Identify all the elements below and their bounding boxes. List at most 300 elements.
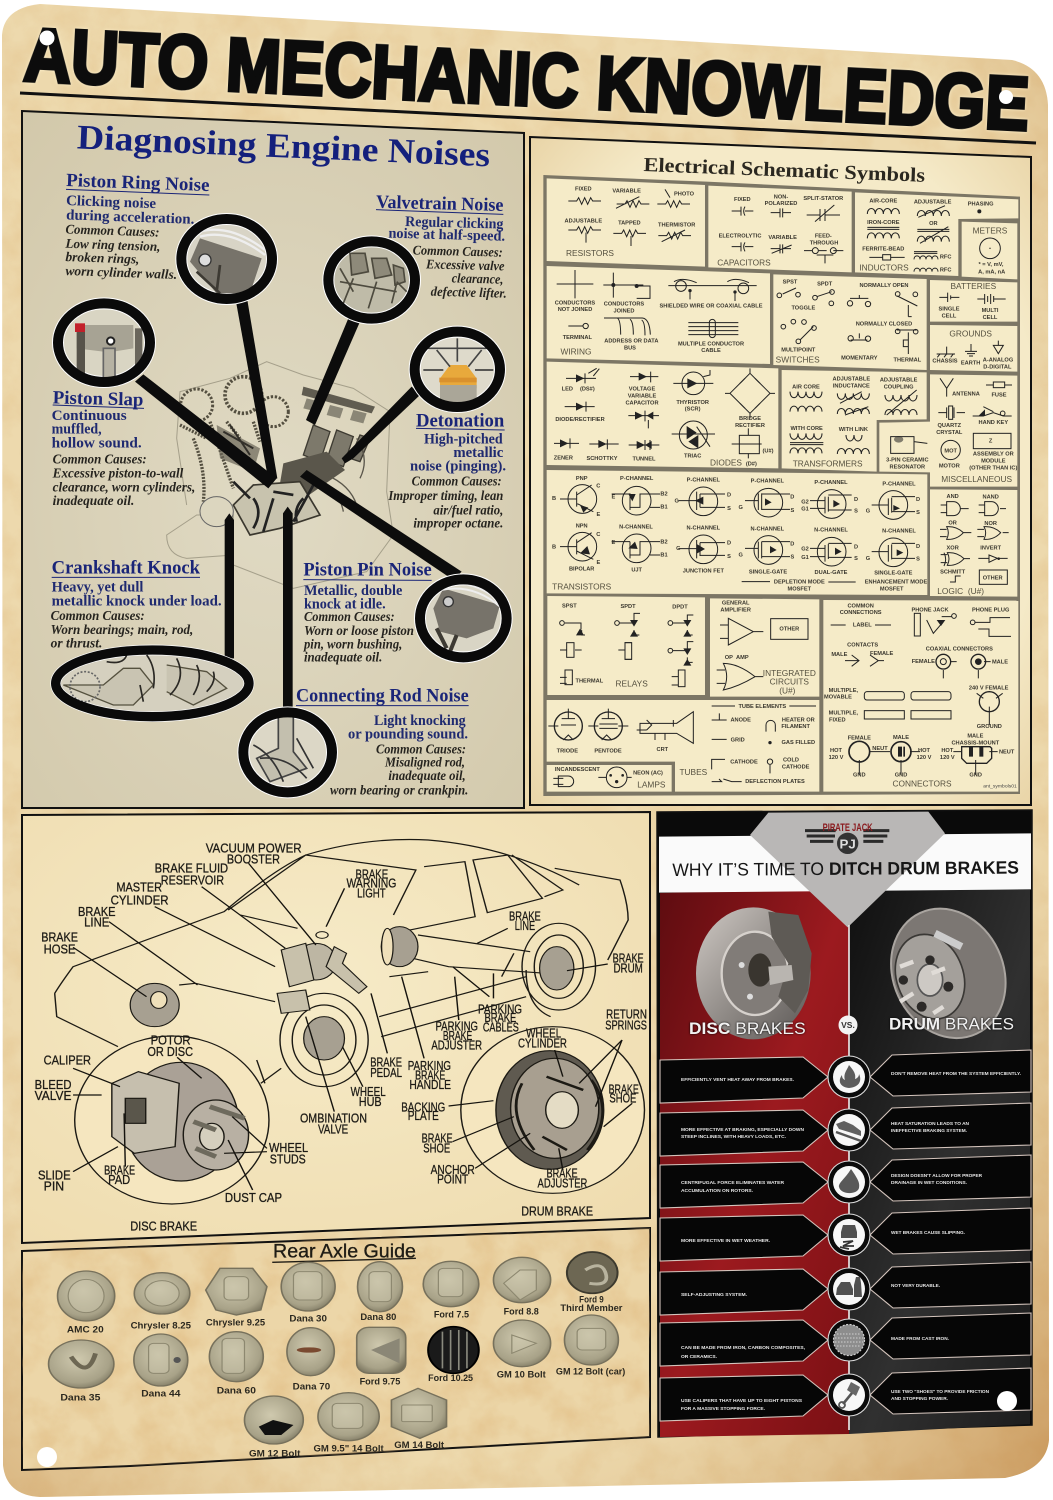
cell: miscellaneous: FUSE [991, 392, 1007, 398]
cell: miscellaneous: MISCELLANEOUS [941, 474, 1013, 484]
part labels: HANDLE [409, 1078, 451, 1093]
block: connecting rod noise: Connecting Rod Noise [296, 686, 469, 707]
title rule [20, 93, 1036, 143]
cell: lamps: INCANDESCENT [555, 767, 600, 773]
drum drawbacks text: DESIGN DOESN'T ALLOW FOR PROPER [891, 1173, 982, 1179]
cell: integrated circuits: OTHER [779, 627, 799, 633]
cell: capacitors: SPLIT-STATOR [803, 196, 843, 202]
cell: transistors: B2 [660, 539, 668, 545]
drum brake photo [870, 890, 1026, 1057]
cell: relays: THERMAL [576, 678, 604, 684]
cell: transistors: S [790, 555, 794, 561]
block: piston ring noise: Common Causes: [65, 221, 160, 240]
cell: batteries: CELL [983, 315, 998, 321]
cell: transistors: E [596, 560, 600, 566]
cell: logic: INVERT [980, 545, 1002, 551]
cell: connectors: COAXIAL CONNECTORS [926, 646, 993, 652]
cell: capacitors: CAPACITORS [717, 257, 771, 267]
part labels: CYLINDER [111, 894, 169, 908]
block: connecting rod noise: Common Causes: [376, 741, 466, 756]
part labels: MASTER [116, 881, 162, 895]
disc advantages text: USE CALIPERS THAT HAVE UP TO EIGHT PISTONS [681, 1398, 803, 1404]
part labels: OMBINATION [300, 1112, 367, 1126]
cell: resistors: THERMISTOR [658, 223, 695, 229]
drum drawbacks text: WET BRAKES CAUSE SLIPPING. [891, 1230, 966, 1236]
cell: inductors: AIR-CORE [869, 199, 898, 205]
cell: miscellaneous: ANTENNA [952, 391, 980, 397]
icon: water drop [828, 1161, 870, 1203]
drum drawbacks text [891, 1071, 1022, 1402]
part labels: WHEEL [351, 1085, 386, 1100]
cell: tubes: CATHODE [782, 764, 810, 770]
part labels: PARKING [436, 1020, 478, 1034]
part labels: BRAKE [356, 868, 388, 882]
axle covers row 3 [244, 1388, 447, 1444]
cell: capacitors: FEED- [815, 233, 832, 239]
cell: tubes: HEATER OR [782, 717, 815, 723]
cell: transformers: TRANSFORMERS [793, 459, 863, 469]
cell: connectors: 120 V [917, 755, 932, 761]
block: connecting rod noise: worn bearing or crankpin. [330, 782, 468, 797]
heading underline [272, 1258, 416, 1262]
part labels: BRAKE [78, 905, 116, 920]
banner and logo [659, 812, 1031, 1057]
block: detonation [387, 411, 506, 531]
block: valvetrain noise [376, 192, 507, 301]
cell: transformers: ADJUSTABLE [880, 378, 918, 384]
part labels: BRAKE [422, 1132, 453, 1146]
cell: transistors: D [916, 544, 920, 550]
cell: connectors: GND [969, 773, 982, 779]
part labels: POTOR [151, 1034, 191, 1048]
part labels: SPRINGS [605, 1019, 647, 1033]
cell: resistors: TAPPED [618, 220, 641, 226]
cell: transistors: SINGLE-GATE [749, 570, 787, 576]
part labels: DUST CAP [225, 1191, 282, 1206]
cell: transistors: JUNCTION FET [683, 568, 724, 574]
cell: diodes [547, 362, 778, 468]
block: valvetrain noise: defective lifter. [431, 284, 507, 301]
block: detonation: metallic [453, 445, 504, 461]
cell: transistors: MOSFET [788, 587, 812, 593]
part labels: DISC BRAKE [130, 1220, 197, 1234]
part labels: WHEEL [269, 1141, 308, 1156]
axle labels: GM 10 Bolt [497, 1371, 546, 1380]
cell: connectors: NEUT [872, 746, 888, 752]
cell: miscellaneous: RESONATOR [890, 464, 925, 470]
part labels: BRAKE [484, 1011, 516, 1026]
cell: diodes: VOLTAGE [629, 386, 655, 392]
block: piston pin noise [303, 560, 432, 665]
cell: transistors: G2 [801, 500, 809, 506]
block: piston ring noise: worn cylinder walls. [65, 263, 177, 282]
block: detonation: Common Causes: [412, 474, 502, 489]
cell: diodes: TRIAC [684, 454, 701, 460]
cell: transistors: C [596, 483, 600, 489]
part labels: CYLINDER [518, 1037, 567, 1051]
cell: capacitors: NON- [774, 194, 788, 200]
cell: batteries: SINGLE [938, 307, 960, 313]
part labels: CALIPER [44, 1054, 91, 1068]
cell: logic: SCHMITT [940, 570, 966, 576]
block: detonation: noise (pinging). [410, 458, 506, 474]
cell: connectors: FIXED [829, 718, 846, 724]
cell: switches [773, 274, 927, 370]
cell: transistors: P-CHANNEL [882, 481, 916, 487]
block: connecting rod noise [296, 686, 469, 797]
cell: switches: SPDT [817, 281, 833, 287]
cell: tubes: DEFLECTION PLATES [745, 779, 805, 785]
part labels: SHOE [423, 1142, 450, 1156]
cell: diodes: (U#) [762, 448, 774, 454]
cell: tubes: CRT [657, 747, 669, 753]
part labels: ADJUSTER [431, 1039, 482, 1053]
cell: grounds: GROUNDS [949, 329, 992, 339]
cell: transistors: NPN [576, 524, 588, 530]
block: piston ring noise [64, 170, 210, 282]
leader lines [73, 863, 632, 1190]
cell: transistors: G [676, 546, 681, 552]
part labels: BOOSTER [227, 853, 280, 867]
part labels: PARKING [408, 1059, 451, 1074]
part labels: SLIDE [38, 1169, 71, 1183]
block: piston slap: muffled, [52, 421, 102, 437]
drum drawbacks text: DON'T REMOVE HEAT FROM THE SYSTEM EFFICIENTLY. [891, 1071, 1022, 1077]
cell: grounds: A-ANALOG [983, 358, 1014, 364]
axle labels: Ford 10.25 [428, 1374, 473, 1384]
vs badge: VS. [841, 1020, 855, 1030]
cell: connectors: 120 V [940, 755, 955, 761]
block: piston slap: Continuous [52, 408, 127, 424]
disc advantages text: MORE EFFECTIVE AT BRAKING, ESPECIALLY DOWN [681, 1127, 804, 1133]
cell: transistors: G [738, 505, 743, 511]
rear axle contents [49, 1239, 625, 1459]
part labels: OR DISC [147, 1045, 193, 1060]
engine sketch [167, 362, 393, 588]
cell: transistors: G [866, 509, 871, 515]
disc advantages text: OR CERAMICS. [681, 1354, 718, 1360]
cell: tubes: PENTODE [594, 749, 622, 755]
cell: diodes: ZENER [554, 455, 573, 461]
block: crankshaft knock: metallic knock under load. [52, 594, 222, 610]
block: piston pin noise: Common Causes: [304, 609, 395, 624]
cell: wiring [547, 266, 770, 364]
cell: integrated circuits: AMPLIFIER [720, 607, 751, 613]
part labels: BACKING [401, 1101, 445, 1115]
axle labels: Dana 70 [293, 1382, 331, 1392]
cell: wiring: TERMINAL [563, 335, 592, 341]
part labels: STUDS [270, 1153, 306, 1167]
cell: transformers: WITH CORE [790, 426, 823, 432]
cell: transistors: MOSFET [880, 587, 904, 593]
cell: transformers: ADJUSTABLE [833, 377, 870, 383]
block: piston ring noise: during acceleration. [66, 207, 195, 228]
cell: miscellaneous: QUARTZ [938, 423, 962, 429]
cell: transistors: G1 [801, 507, 809, 513]
axle labels: GM 12 Bolt (car) [556, 1367, 625, 1377]
heading: Diagnosing Engine Noises [76, 118, 491, 174]
part labels: LIGHT [357, 887, 386, 901]
panel mottling [22, 1228, 650, 1470]
disc advantages text: MORE EFFECTIVE IN WET WEATHER. [681, 1238, 771, 1244]
cell: inductors: INDUCTORS [859, 263, 909, 273]
cell: logic: NOR [984, 521, 997, 527]
heading: Electrical Schematic Symbols [643, 154, 926, 187]
axle labels: Ford 8.8 [504, 1307, 539, 1317]
cell: inductors [855, 192, 1018, 276]
cell: transformers: INDUCTANCE [833, 383, 870, 389]
cell: connectors: LABEL [853, 623, 872, 629]
block: crankshaft knock [51, 557, 222, 651]
cell: transistors: E [611, 495, 615, 501]
cell: transistors: S [916, 510, 920, 516]
disc advantages text: EFFICIENTLY VENT HEAT AWAY FROM BRAKES. [681, 1077, 795, 1083]
cell: transistors: S [727, 506, 731, 512]
drum brakes label: DRUM BRAKES [889, 1014, 1014, 1033]
cell: tubes: ANODE [730, 718, 751, 724]
cell: inductors: ADJUSTABLE [914, 199, 952, 205]
engine block [200, 387, 375, 535]
cell: transistors: D [727, 493, 731, 499]
cell: connectors: MALE [831, 652, 848, 658]
cell: diodes: (D#) [746, 461, 757, 467]
cell: switches: TOGGLE [791, 305, 815, 311]
part labels: VACUUM POWER [206, 842, 302, 856]
cell: integrated circuits: CIRCUITS [770, 676, 809, 686]
car outline [55, 839, 628, 1087]
cell: diodes: DIODES [710, 457, 742, 467]
cell: transistors: C [596, 532, 600, 538]
cell: logic [930, 489, 1017, 597]
block: crankshaft knock: Crankshaft Knock [52, 557, 201, 578]
axle covers row 1 [58, 1252, 618, 1321]
cell: transistors: B1 [660, 553, 668, 559]
panel: why it's time to ditch drum brakes [657, 810, 1032, 1437]
icon: mechanic and car [828, 1268, 870, 1310]
drum drawbacks text: USE TWO "SHOES" TO PROVIDE FRICTION [891, 1389, 989, 1395]
cell: connectors: CONNECTORS [892, 779, 952, 789]
cell: transistors: UJT [631, 567, 643, 573]
cell: logic: OTHER [983, 575, 1003, 581]
cell: grounds [930, 325, 1017, 372]
cell: logic: NAND [982, 495, 999, 501]
block: piston slap: inadequate oil. [53, 493, 134, 508]
cell: relays: DPDT [672, 604, 688, 610]
cell: transistors: D [790, 494, 794, 500]
axle labels: Chrysler 9.25 [206, 1318, 265, 1328]
cell: transistors: G [866, 556, 871, 562]
axle labels: Dana 60 [217, 1386, 256, 1396]
cell: transistors: N-CHANNEL [882, 529, 916, 535]
drum drawbacks text: INEFFECTIVE BRAKING SYSTEM. [891, 1128, 968, 1134]
axle labels: GM 9.5" 14 Bolt [313, 1445, 384, 1454]
cell: connectors: FEMALE [870, 651, 894, 657]
cell: transistors: D [854, 545, 858, 551]
part labels: BLEED [35, 1078, 72, 1093]
cell: diodes: SCHOTTKY [586, 456, 618, 462]
disc advantages text [681, 1077, 806, 1412]
cell: logic: OR [948, 520, 957, 526]
axle labels: GM 12 Bolt [249, 1450, 301, 1459]
cell: miscellaneous: CRYSTAL [936, 430, 963, 436]
lens: valvetrain noise [328, 241, 415, 319]
disc advantages text: STEEP INCLINES, WITH HEAVY LOADS, ETC. [681, 1134, 787, 1140]
cell: switches: MULTIPOINT [781, 348, 816, 354]
cell: wiring: CONDUCTORS [604, 302, 644, 308]
part labels: LINE [515, 919, 535, 934]
silver diamond [750, 812, 945, 927]
dark drum side background [849, 888, 1030, 1434]
cell: integrated circuits: (U#) [779, 685, 796, 695]
white banner [659, 833, 1031, 893]
block: piston slap: hollow sound. [52, 436, 142, 452]
cell: relays: RELAYS [616, 679, 648, 689]
cell: batteries: BATTERIES [950, 281, 997, 291]
lens: piston ring noise [181, 219, 272, 299]
part labels: BRAKE [370, 1056, 402, 1070]
cell: relays [547, 596, 705, 695]
block: detonation: air/fuel ratio, [433, 502, 503, 517]
cell: integrated circuits: OP AMP [725, 655, 749, 661]
cell: switches: SPST [783, 280, 798, 286]
lens: connecting rod noise [243, 712, 332, 792]
cell: inductors: RFC [940, 254, 951, 260]
cell: batteries: CELL [942, 314, 957, 320]
block: valvetrain noise: Common Causes: [413, 242, 503, 260]
part labels: HOSE [44, 943, 76, 957]
block: detonation: improper octane. [413, 516, 503, 531]
block: piston slap: Excessive piston-to-wall [52, 466, 184, 481]
cell: integrated circuits: GENERAL [722, 600, 750, 606]
cell: transistors [547, 470, 927, 595]
disc advantages text: FOR A MASSIVE STOPPING FORCE. [681, 1406, 766, 1412]
cell: wiring: MULTIPLE CONDUCTOR [678, 341, 744, 347]
cell: miscellaneous: MOTOR [939, 464, 960, 470]
cell: transistors: D [790, 541, 794, 547]
panel: rear axle guide [22, 1228, 650, 1470]
cell: transformers [782, 370, 927, 472]
schematic contents [543, 154, 1020, 796]
cell: wiring: ADDRESS OR DATA [604, 338, 658, 344]
cell: transistors: G [738, 553, 743, 559]
cell: connectors: GND [895, 773, 907, 779]
cell: capacitors: VARIABLE [768, 235, 797, 241]
block: valvetrain noise: Regular clicking [405, 214, 504, 233]
cell: capacitors: FIXED [734, 197, 751, 203]
panel: diagnosing engine noises [22, 111, 524, 808]
lens: detonation [415, 332, 500, 407]
part labels: BRAKE [104, 1164, 135, 1178]
cell: diodes: (DS#) [580, 386, 595, 392]
cell: connectors: MALE [967, 733, 984, 739]
center divider [848, 925, 850, 1430]
cell: transistors: S [916, 557, 920, 563]
cell: logic: LOGIC (U#) [937, 586, 984, 596]
block: crankshaft knock: or thrust. [51, 636, 102, 651]
part labels: ADJUSTER [538, 1177, 587, 1191]
drum drawbacks text: AND STOPPING POWER. [891, 1396, 949, 1402]
cell: connectors: MALE [893, 735, 909, 741]
cell: connectors: NEUT [999, 749, 1015, 755]
logo: PJ [840, 836, 856, 851]
cell: batteries: MULTI [982, 308, 999, 314]
cell: switches: SWITCHES [776, 355, 820, 365]
part labels: VALVE [35, 1089, 71, 1104]
cell: connectors: GND [853, 773, 866, 779]
cell: connectors: ant_symbols01 [983, 783, 1017, 789]
cell: meters: METERS [973, 226, 1008, 236]
block: piston pin noise: inadequate oil. [304, 650, 382, 665]
axle labels: Ford 9.75 [360, 1377, 401, 1387]
cell: diodes: RECTIFIER [735, 423, 765, 429]
block: crankshaft knock: Worn bearings; main, rod, [51, 622, 193, 637]
cell: connectors: FEMALE [912, 659, 935, 665]
cell: capacitors: THROUGH [810, 241, 838, 247]
cell: switches: NORMALLY CLOSED [856, 321, 912, 327]
cell: integrated circuits: INTEGRATED [763, 668, 816, 678]
cell: diodes: CAPACITOR [625, 400, 659, 406]
cell: lamps: LAMPS [637, 779, 666, 789]
part labels: SHOE [609, 1092, 636, 1106]
part labels: VALVE [318, 1123, 348, 1137]
block: piston slap [52, 387, 195, 508]
part labels: PEDAL [370, 1066, 402, 1081]
cell: diodes: DIODE/RECTIFIER [555, 417, 605, 423]
front disc, master cylinder and rear drum [130, 927, 574, 1060]
block: piston ring noise: Clicking noise [66, 193, 157, 212]
block: connecting rod noise: Light knocking [374, 713, 466, 729]
block: piston pin noise: Worn or loose piston [304, 623, 414, 638]
part labels: PAD [108, 1173, 130, 1188]
cell: transformers: WITH LINK [839, 427, 869, 433]
cell: inductors: PHASING [968, 202, 994, 208]
cell: relays: SPDT [620, 604, 636, 610]
cell: miscellaneous: MOT [944, 448, 957, 454]
brake diagram contents [35, 839, 647, 1234]
disc brake detail [75, 1036, 269, 1204]
cell: wiring: JOINED [613, 309, 635, 315]
axle labels: Chrysler 8.25 [131, 1322, 191, 1331]
block: piston slap: Common Causes: [53, 451, 147, 466]
heading: Rear Axle Guide [273, 1239, 416, 1262]
cell: wiring: WIRING [560, 346, 591, 356]
cell: transistors: TRANSISTORS [552, 581, 612, 591]
cell: transistors: P-CHANNEL [687, 477, 721, 483]
cell: inductors: IRON-CORE [867, 220, 900, 226]
cell: connectors: PHONE JACK [911, 608, 949, 614]
drum drawbacks text: NOT VERY DURABLE. [891, 1283, 941, 1289]
disc brake photo [696, 907, 812, 1039]
part labels: PIN [44, 1180, 64, 1194]
part labels: ANCHOR [431, 1163, 475, 1178]
cell: transistors: B2 [660, 492, 668, 498]
icon: slipping car [828, 1214, 870, 1256]
axle labels: Dana 80 [360, 1313, 397, 1323]
cell: switches: MOMENTARY [841, 356, 878, 362]
cell: transistors: DUAL-GATE [815, 570, 848, 576]
block: valvetrain noise: Excessive valve [425, 256, 505, 273]
block: crankshaft knock: Heavy, yet dull [52, 580, 143, 596]
axle labels: Third Member [560, 1304, 623, 1314]
part labels [35, 842, 647, 1234]
cell: miscellaneous: 3-PIN CERAMIC [886, 457, 929, 463]
cell: inductors: RFC [940, 267, 951, 273]
part labels: RESERVOIR [161, 874, 224, 888]
cell: transistors: N-CHANNEL [619, 524, 653, 530]
icon: steep incline [828, 1109, 870, 1151]
part labels: BRAKE [547, 1167, 578, 1181]
cell: diodes: THYRISTOR [676, 400, 709, 406]
